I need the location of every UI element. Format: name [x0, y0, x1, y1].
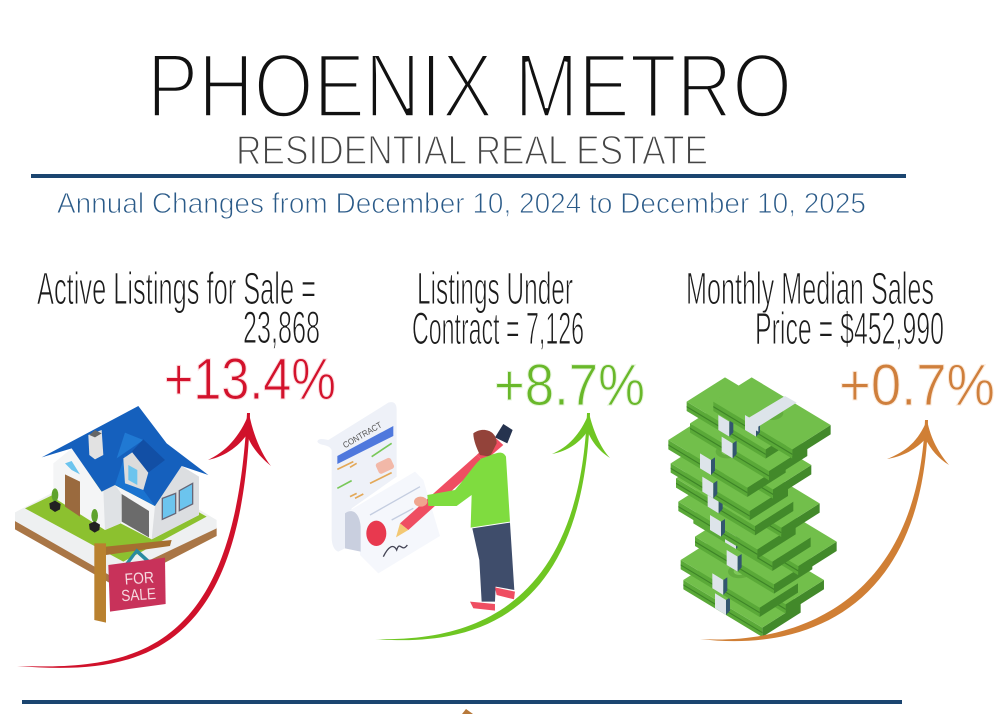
median price label [686, 263, 944, 354]
under contract change: +8.7% [494, 353, 645, 418]
icon: house for sale [15, 406, 217, 623]
icon: house for sale: FOR [124, 570, 155, 589]
active listings label: 23,868 [243, 302, 320, 353]
arrow: red [17, 413, 271, 668]
icon: person signing contract [317, 402, 515, 611]
under contract label: Listings Under [417, 263, 573, 314]
title: PHOENIX METRO [147, 36, 792, 137]
icon: stack of money [668, 377, 837, 637]
panel: listings under contract [317, 263, 645, 640]
under contract label: Contract = 7,126 [412, 303, 584, 354]
icon: person signing contract: CONTRACT [341, 419, 384, 450]
icon: house for sale: SALE [121, 586, 157, 605]
arrow: orange [700, 420, 949, 641]
panel: active listings [15, 263, 336, 668]
arrow: green [375, 413, 610, 640]
active listings label [37, 263, 320, 353]
active listings label: Active Listings for Sale = [37, 263, 316, 314]
clipped marker at bottom edge [462, 709, 473, 714]
bottom divider [22, 700, 902, 704]
date range subheading: Annual Changes from December 10, 2024 to December 10, 2025 [57, 188, 866, 220]
under contract label [412, 263, 584, 354]
subtitle: RESIDENTIAL REAL ESTATE [236, 127, 708, 173]
active listings change: +13.4% [164, 347, 336, 412]
panel: median sales price [668, 263, 995, 641]
top divider [31, 174, 906, 178]
